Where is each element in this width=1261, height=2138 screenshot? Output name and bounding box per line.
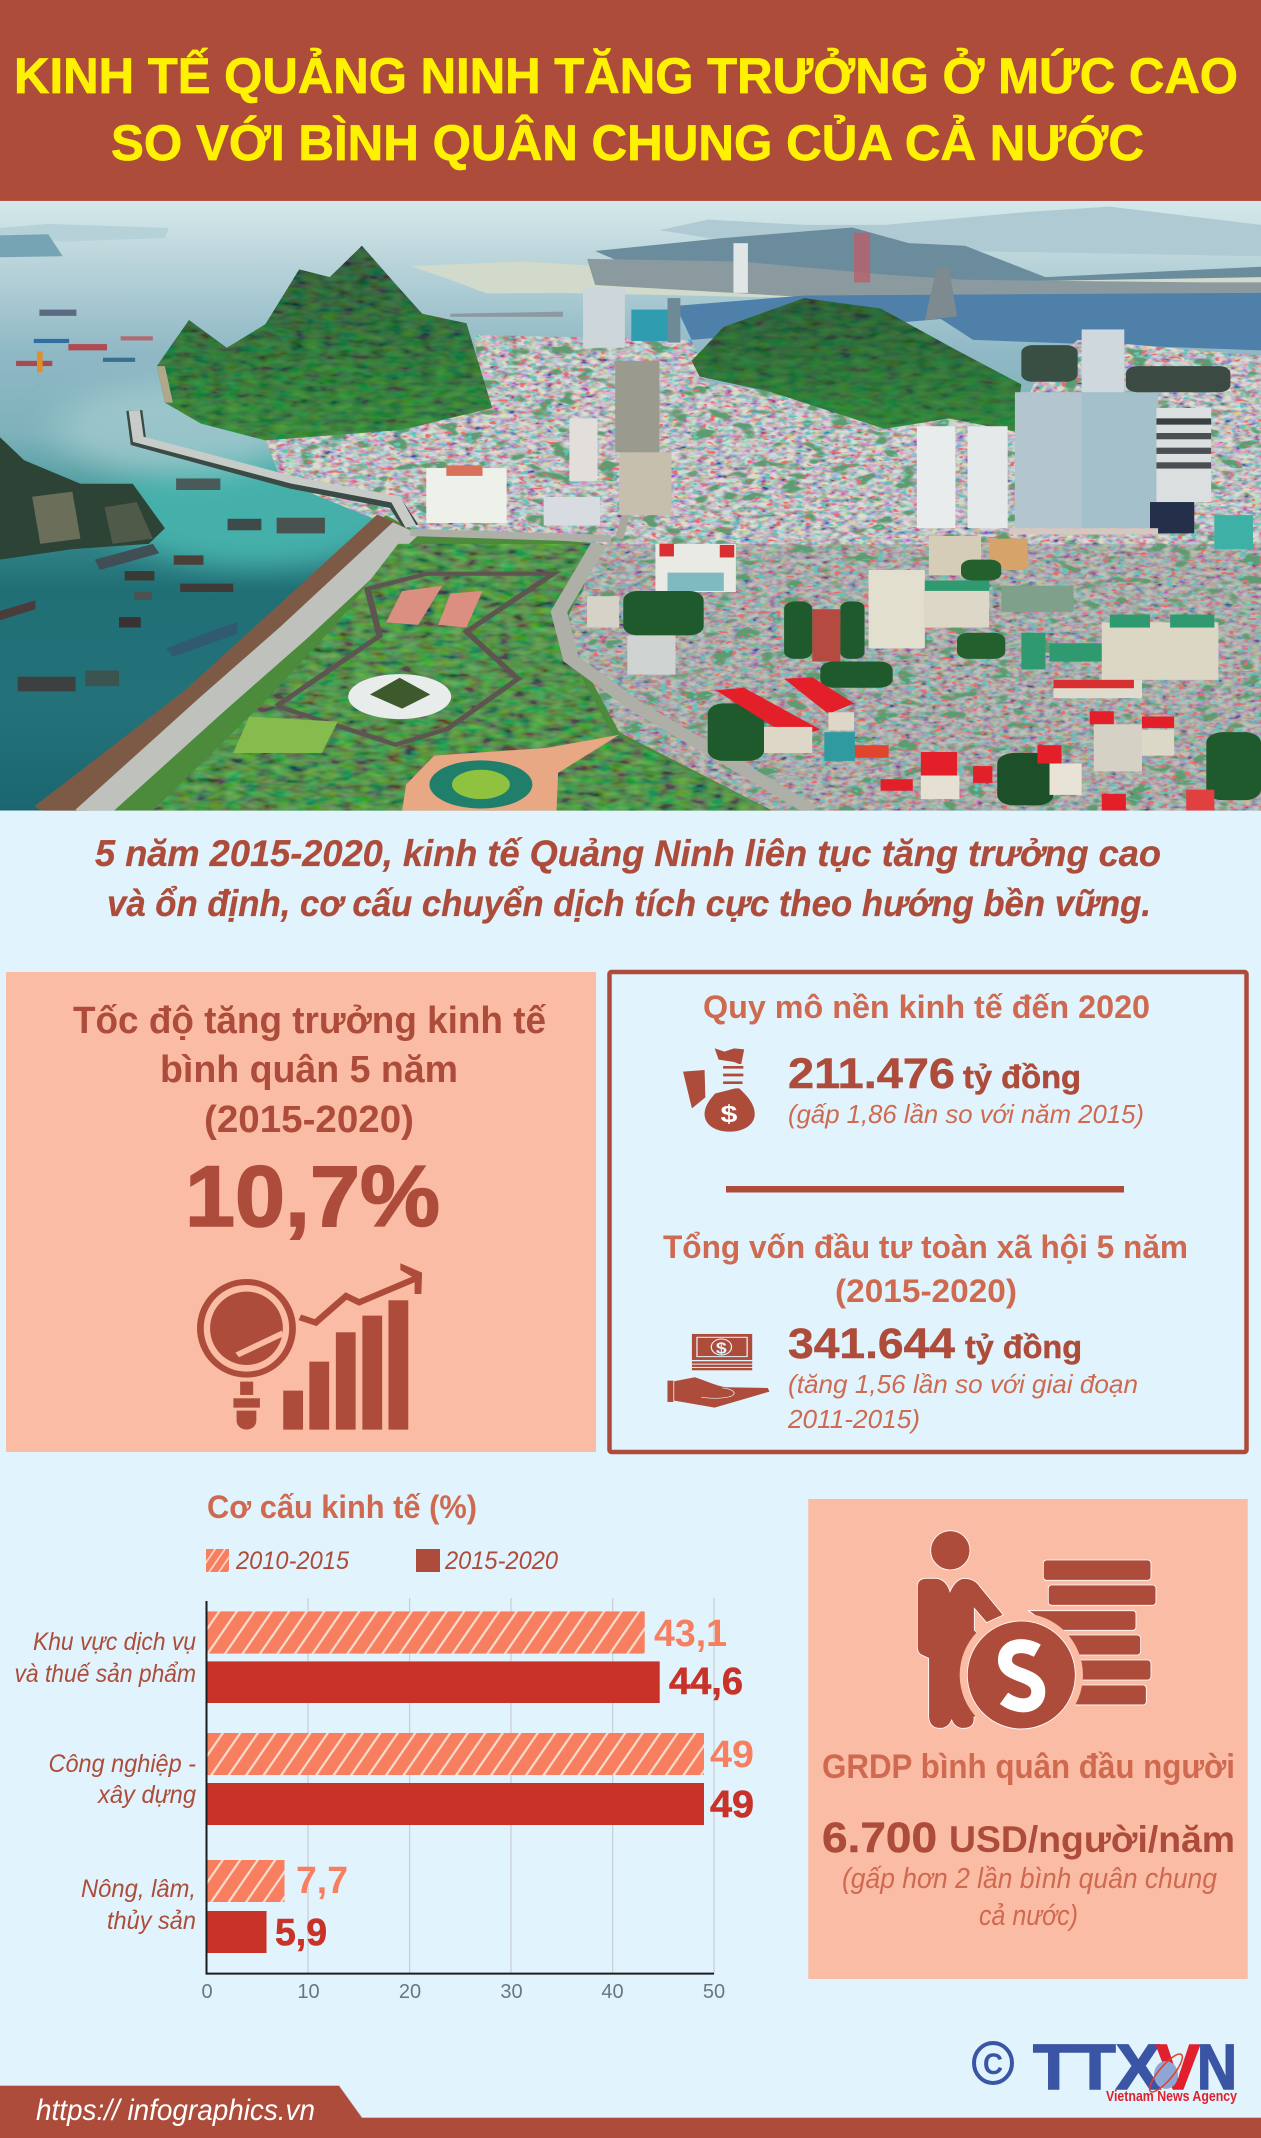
logo: TTXVN: C: [983, 2048, 1003, 2081]
note: investment: [787, 1369, 1138, 1434]
photo: aerial view of Ha Long city: [0, 201, 1261, 816]
logo: TTXVN: V: [1156, 2031, 1200, 2103]
central mountain: [157, 246, 492, 440]
legend: [206, 1547, 558, 1575]
icon: person with coins: [917, 1531, 1156, 1737]
axis labels: 0: [201, 1981, 213, 2003]
panel: economy scale and investment: [610, 972, 1246, 1452]
heading: GRDP bình quân đầu người: [822, 1748, 1235, 1786]
icon: hand with banknotes: [667, 1334, 769, 1408]
boats: [0, 310, 325, 691]
axis labels: 20: [399, 1981, 421, 2003]
heading: investment: Tổng vốn đầu tư toàn xã hội 5 năm: [663, 1229, 1188, 1265]
value labels: 44,6: [669, 1661, 743, 1703]
right sea: [676, 293, 1261, 350]
logo: TTXVN: TTX: [1033, 2031, 1161, 2103]
inland road: [410, 450, 812, 811]
axes: [206, 1601, 714, 1974]
note: investment: 2011-2015): [787, 1404, 920, 1434]
city ground: [265, 335, 1261, 811]
note: (gấp hơn 2 lần bình quân chung: [842, 1863, 1217, 1895]
value labels: 5,9: [275, 1912, 327, 1954]
title: [14, 47, 1238, 171]
note: investment: (tăng 1,56 lần so với giai đoạn: [788, 1369, 1138, 1399]
value: economy scale: tỷ đồng: [963, 1059, 1081, 1095]
right hill: [692, 298, 1021, 431]
value labels: 49: [710, 1734, 754, 1776]
value: investment: 341.644: [788, 1320, 955, 1368]
icon: magnifier and rising bars: [197, 1263, 422, 1430]
heading: bình quân 5 năm: [160, 1049, 458, 1091]
intro text: và ổn định, cơ cấu chuyển dịch tích cực theo hướng bền vững.: [107, 883, 1151, 924]
logo: TTXVN: Vietnam News Agency: [1106, 2088, 1238, 2105]
panel: GRDP per capita: [808, 1499, 1248, 1979]
footer band: [0, 2085, 1261, 2138]
category labels: và thuế sản phẩm: [14, 1660, 196, 1688]
icon: hand with banknotes: $: [716, 1339, 727, 1357]
value: 10,7%: [185, 1149, 440, 1245]
axis labels: 30: [500, 1981, 523, 2003]
category labels: Nông, lâm,: [81, 1875, 196, 1903]
distant hills: [0, 207, 1261, 301]
value labels: 7,7: [296, 1860, 348, 1902]
heading: investment: (2015-2020): [835, 1273, 1017, 1309]
value: USD/người/năm: [949, 1819, 1235, 1860]
value: economy scale: [788, 1050, 1081, 1098]
header band: [0, 0, 1261, 201]
bars: [206, 1611, 704, 1953]
legend: 2015-2020: [444, 1547, 558, 1575]
axis labels: 10: [297, 1981, 320, 2003]
heading: investment: [663, 1229, 1188, 1309]
trees and red roofs: [587, 345, 1261, 811]
logo: TTXVN: [974, 2031, 1238, 2105]
axis labels: [201, 1981, 725, 2003]
value: economy scale: 211.476: [788, 1050, 955, 1098]
divider: [726, 1186, 1124, 1192]
category labels: [14, 1628, 196, 1935]
panel: economic structure chart: [14, 1489, 754, 2003]
value: 6.700: [822, 1814, 937, 1862]
value labels: [275, 1613, 754, 1954]
category labels: xây dựng: [97, 1781, 196, 1809]
axis labels: 40: [601, 1981, 624, 2003]
note: cả nước): [979, 1900, 1078, 1932]
value: investment: tỷ đồng: [965, 1329, 1082, 1365]
intro text: [95, 833, 1161, 924]
towers: [426, 288, 1253, 698]
value: investment: [788, 1320, 1082, 1368]
land under park: [51, 515, 772, 811]
title: KINH TẾ QUẢNG NINH TĂNG TRƯỞNG Ở MỨC CAO: [14, 47, 1238, 104]
heading: [73, 1000, 547, 1141]
heading: (2015-2020): [204, 1099, 414, 1141]
icon: hand holding money bag: [683, 1048, 755, 1132]
park: [153, 544, 772, 811]
axis labels: 50: [703, 1981, 725, 2003]
category labels: thủy sản: [107, 1907, 196, 1935]
value labels: 43,1: [654, 1613, 727, 1655]
chart title: Cơ cấu kinh tế (%): [207, 1489, 477, 1525]
logo: TTXVN: N: [1197, 2031, 1237, 2103]
note: [842, 1863, 1217, 1932]
legend: 2010-2015: [235, 1547, 349, 1575]
category labels: Công nghiệp -: [48, 1750, 196, 1778]
intro text: 5 năm 2015-2020, kinh tế Quảng Ninh liên tục tăng trưởng cao: [95, 833, 1161, 874]
category labels: Khu vực dịch vụ: [33, 1628, 196, 1656]
value: [822, 1814, 1235, 1862]
panel: growth rate: [6, 972, 596, 1452]
title: SO VỚI BÌNH QUÂN CHUNG CỦA CẢ NƯỚC: [111, 114, 1144, 171]
heading: economy scale: Quy mô nền kinh tế đến 2020: [703, 989, 1150, 1025]
value labels: 49: [710, 1784, 754, 1826]
coastal road: [51, 411, 411, 816]
left cliff: [0, 437, 165, 560]
heading: Tốc độ tăng trưởng kinh tế: [73, 1000, 547, 1042]
note: economy scale: (gấp 1,86 lần so với năm 2015): [788, 1099, 1144, 1129]
source url: https:// infographics.vn: [36, 2094, 315, 2127]
icon: hand holding money bag: $: [721, 1100, 737, 1127]
